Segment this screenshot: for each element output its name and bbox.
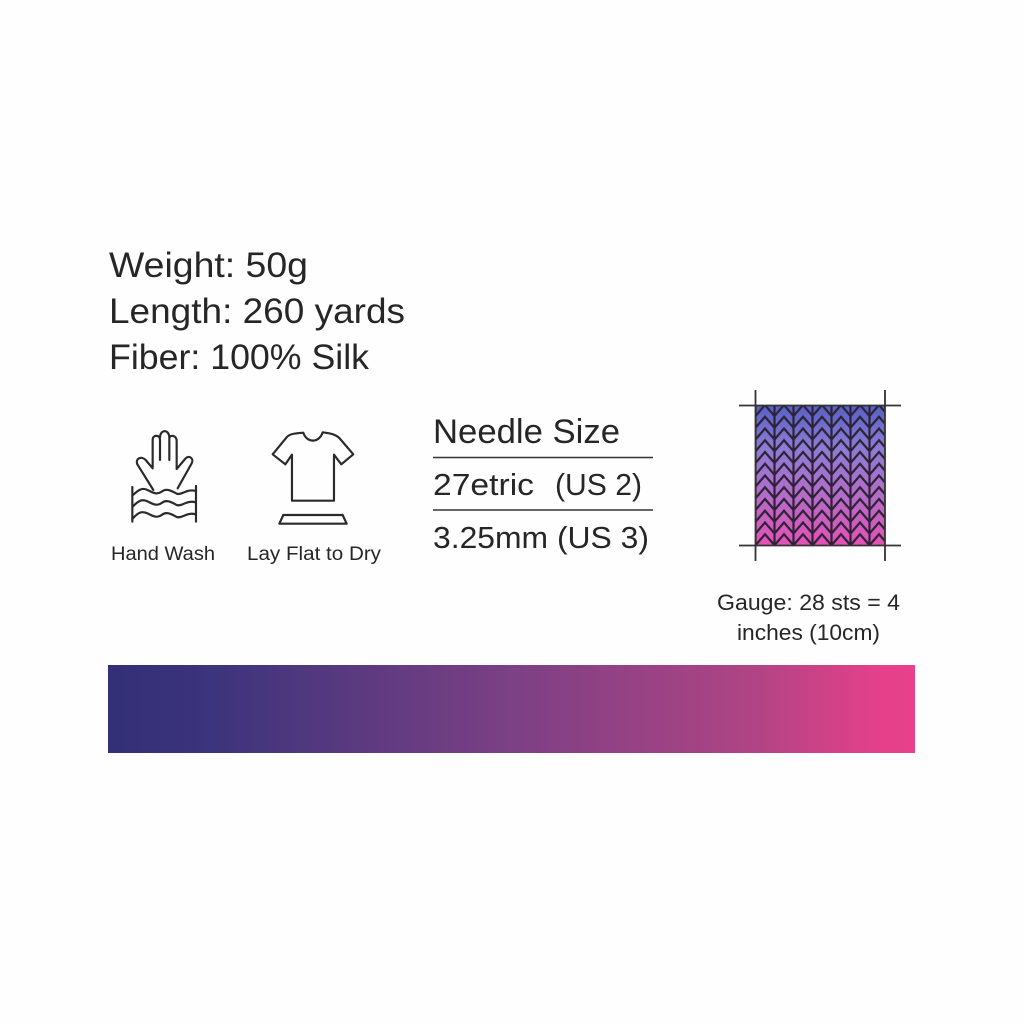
specifications text: Fiber: 100% Silk (109, 338, 370, 377)
icon: hand wash (132, 431, 196, 522)
gauge swatch (739, 390, 901, 561)
row: US 2 (433, 467, 642, 502)
icon: t-shirt drying flat (273, 432, 353, 524)
colour gradient bar (108, 665, 915, 753)
gauge caption: inches (10cm) (737, 620, 880, 645)
label: lay flat to dry: Lay Flat to Dry (247, 544, 382, 565)
gauge caption (717, 590, 900, 645)
specifications text: Weight: 50g (109, 246, 308, 285)
label: hand wash: Hand Wash (111, 544, 215, 565)
row: US 2: 27etric (433, 467, 534, 502)
heading: needle size: Needle Size (433, 413, 620, 451)
row: US 3: 3.25mm (US 3) (433, 520, 649, 555)
specifications text: Length: 260 yards (109, 292, 405, 331)
needle size table (433, 413, 653, 555)
row: US 2: (US 2) (555, 467, 642, 502)
gauge caption: Gauge: 28 sts = 4 (717, 590, 900, 615)
specifications text (109, 246, 405, 377)
swatch fill (756, 405, 886, 546)
